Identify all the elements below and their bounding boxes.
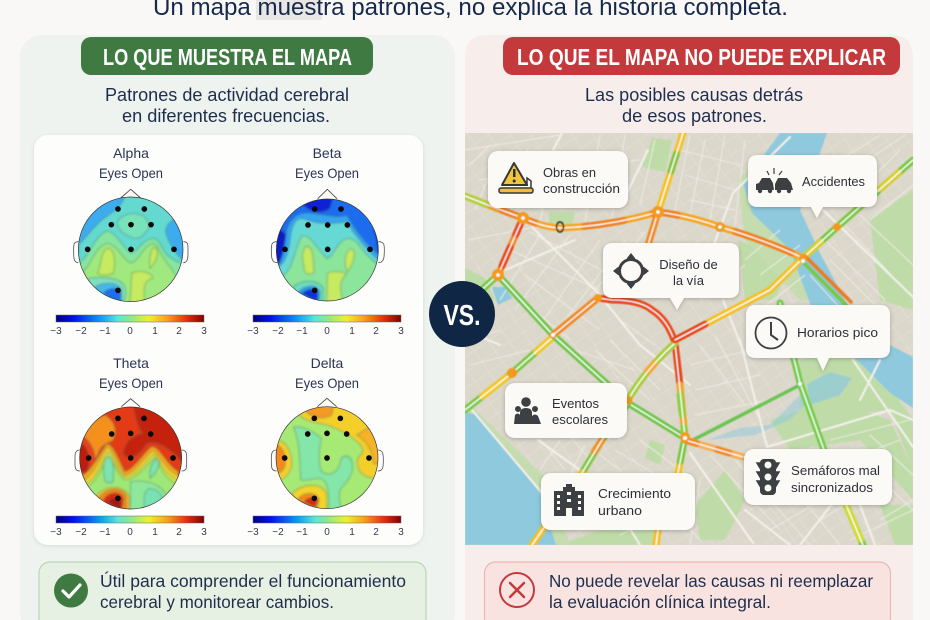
colorbar: alpha: −2 [75, 326, 87, 337]
cause: horarios pico: Horarios pico [797, 325, 878, 340]
icon: roundabout [613, 253, 649, 289]
colorbar: delta [247, 516, 404, 538]
topomap: beta: Eyes Open [295, 165, 359, 181]
topomap: theta: Theta [113, 355, 149, 371]
icon: x mark [500, 573, 534, 607]
colorbar: beta: 1 [349, 326, 355, 337]
subtitle: causas [585, 85, 803, 126]
callout: limitation: la evaluación clínica integral. [549, 592, 771, 612]
subtitle: patrones: Patrones de actividad cerebral [105, 85, 349, 105]
parks [465, 138, 913, 545]
colorbar: theta: 3 [201, 527, 207, 538]
subtitle: causas: Las posibles causas detrás [585, 85, 803, 105]
icon: clock [756, 318, 786, 348]
icon: family [514, 397, 541, 424]
topomap: beta [247, 145, 404, 337]
topomap: alpha [50, 145, 207, 337]
callout: useful [39, 562, 426, 620]
colorbar: delta: 1 [349, 527, 355, 538]
topomap: alpha: Eyes Open [99, 165, 163, 181]
minor streets [465, 135, 913, 545]
colorbar: beta: −1 [296, 326, 308, 337]
callout: useful: cerebral y monitorear cambios. [100, 592, 334, 612]
road: green link [693, 385, 800, 440]
icon: check [54, 574, 88, 608]
road: upper connector [498, 218, 523, 275]
colorbar: beta: 0 [324, 326, 330, 337]
topomap: delta: Eyes Open [295, 375, 359, 391]
road: top vertical [644, 133, 688, 243]
icon: crashed cars [756, 168, 793, 193]
colorbar: theta: −3 [50, 527, 62, 538]
cause: horarios pico [746, 305, 890, 371]
cause: crecimiento urbano: Crecimiento [598, 486, 671, 501]
colorbar: delta: 3 [398, 527, 404, 538]
panel: lo que muestra el mapa [20, 35, 455, 620]
cause: eventos escolares: Eventos [552, 396, 599, 411]
colorbar: beta: −2 [272, 326, 284, 337]
colorbar: theta: −1 [99, 527, 111, 538]
callout: useful: Útil para comprender el funcionamiento [100, 570, 406, 591]
cause: eventos escolares [505, 383, 627, 438]
cause: eventos escolares: escolares [552, 412, 608, 427]
colorbar: alpha: −3 [50, 326, 62, 337]
icon: warning and machine [499, 163, 533, 193]
colorbar: beta: −3 [247, 326, 259, 337]
cause: diseño de la vía: Diseño de [659, 257, 718, 272]
road: long diagonal [675, 160, 913, 340]
colorbar: delta: 0 [324, 527, 330, 538]
vs badge [429, 281, 495, 347]
colorbar: delta: −3 [247, 527, 259, 538]
callout: limitation: No puede revelar las causas ni reemplazar [549, 571, 873, 591]
colorbar: theta: 2 [176, 527, 182, 538]
traffic map [465, 133, 913, 545]
road: southeast vertical [780, 303, 863, 545]
cause: semáforos mal sincronizados: sincronizados [791, 480, 874, 495]
colorbar: delta: −2 [272, 527, 284, 538]
panel: lo que el mapa no puede explicar [465, 35, 913, 620]
cause: obras en construcción: Obras en [543, 165, 596, 180]
major streets [465, 133, 913, 545]
callout: limitation [484, 562, 890, 620]
cause: obras en construcción [488, 151, 628, 208]
colorbar: alpha: 3 [201, 326, 207, 337]
vs badge: VS. [444, 300, 480, 332]
road: ring [553, 298, 685, 437]
cause: crecimiento urbano [541, 473, 695, 530]
colorbar: alpha [50, 315, 207, 337]
icon: building [554, 484, 584, 516]
heading banner: lo que muestra [81, 37, 373, 75]
topomap: theta [50, 355, 207, 538]
cause: accidentes: Accidentes [802, 174, 865, 189]
cause: obras en construcción: construcción [543, 181, 620, 196]
road: green diagonal to center [498, 275, 685, 438]
topomap: delta [247, 355, 404, 538]
colorbar: theta [50, 516, 207, 538]
cause: diseño de la vía: la vía [673, 273, 705, 288]
heading banner: no puede explicar [503, 37, 900, 75]
subtitle: patrones: en diferentes frecuencias. [122, 106, 330, 126]
road: inner curve [628, 343, 675, 400]
cause: semáforos mal sincronizados: Semáforos mal [791, 463, 880, 478]
topomap: theta: Eyes Open [99, 375, 163, 391]
colorbar: theta: 0 [127, 527, 133, 538]
subtitle: patrones [105, 85, 349, 126]
road: river crossing [801, 256, 851, 306]
icon: traffic light [757, 459, 779, 495]
road: left green stub [480, 276, 497, 292]
card: topographic maps [34, 135, 423, 545]
colorbar: delta: −1 [296, 527, 308, 538]
colorbar: theta: 1 [152, 527, 158, 538]
colorbar: alpha: −1 [99, 326, 111, 337]
topomap: beta: Beta [313, 145, 342, 161]
topomap: alpha: Alpha [113, 145, 149, 161]
colorbar: beta: 2 [373, 326, 379, 337]
colorbar: delta: 2 [373, 527, 379, 538]
heading banner: lo que muestra: LO QUE MUESTRA EL MAPA [103, 44, 352, 70]
colorbar: beta [247, 315, 404, 337]
traffic roads [465, 133, 913, 545]
rivers [465, 133, 913, 545]
road: horizontal top arterial [465, 196, 803, 258]
road: southbound right [656, 437, 685, 545]
colorbar: beta: 3 [398, 326, 404, 337]
road: southbound left [532, 403, 628, 545]
road: bottom-left diagonal [465, 337, 553, 410]
colorbar: alpha: 0 [127, 326, 133, 337]
topomap: delta: Delta [311, 355, 344, 371]
cause: crecimiento urbano: urbano [598, 503, 642, 518]
small car marker [556, 222, 564, 232]
colorbar: alpha: 2 [176, 326, 182, 337]
river banks [465, 170, 808, 545]
intersections [492, 206, 841, 442]
colorbar: alpha: 1 [152, 326, 158, 337]
colorbar: theta: −2 [75, 527, 87, 538]
subtitle: causas: de esos patrones. [622, 106, 767, 126]
cause: diseño de la vía [603, 243, 739, 310]
cause: accidentes [748, 155, 877, 218]
road: orange link [685, 440, 743, 457]
cause: semáforos mal sincronizados [744, 449, 892, 505]
